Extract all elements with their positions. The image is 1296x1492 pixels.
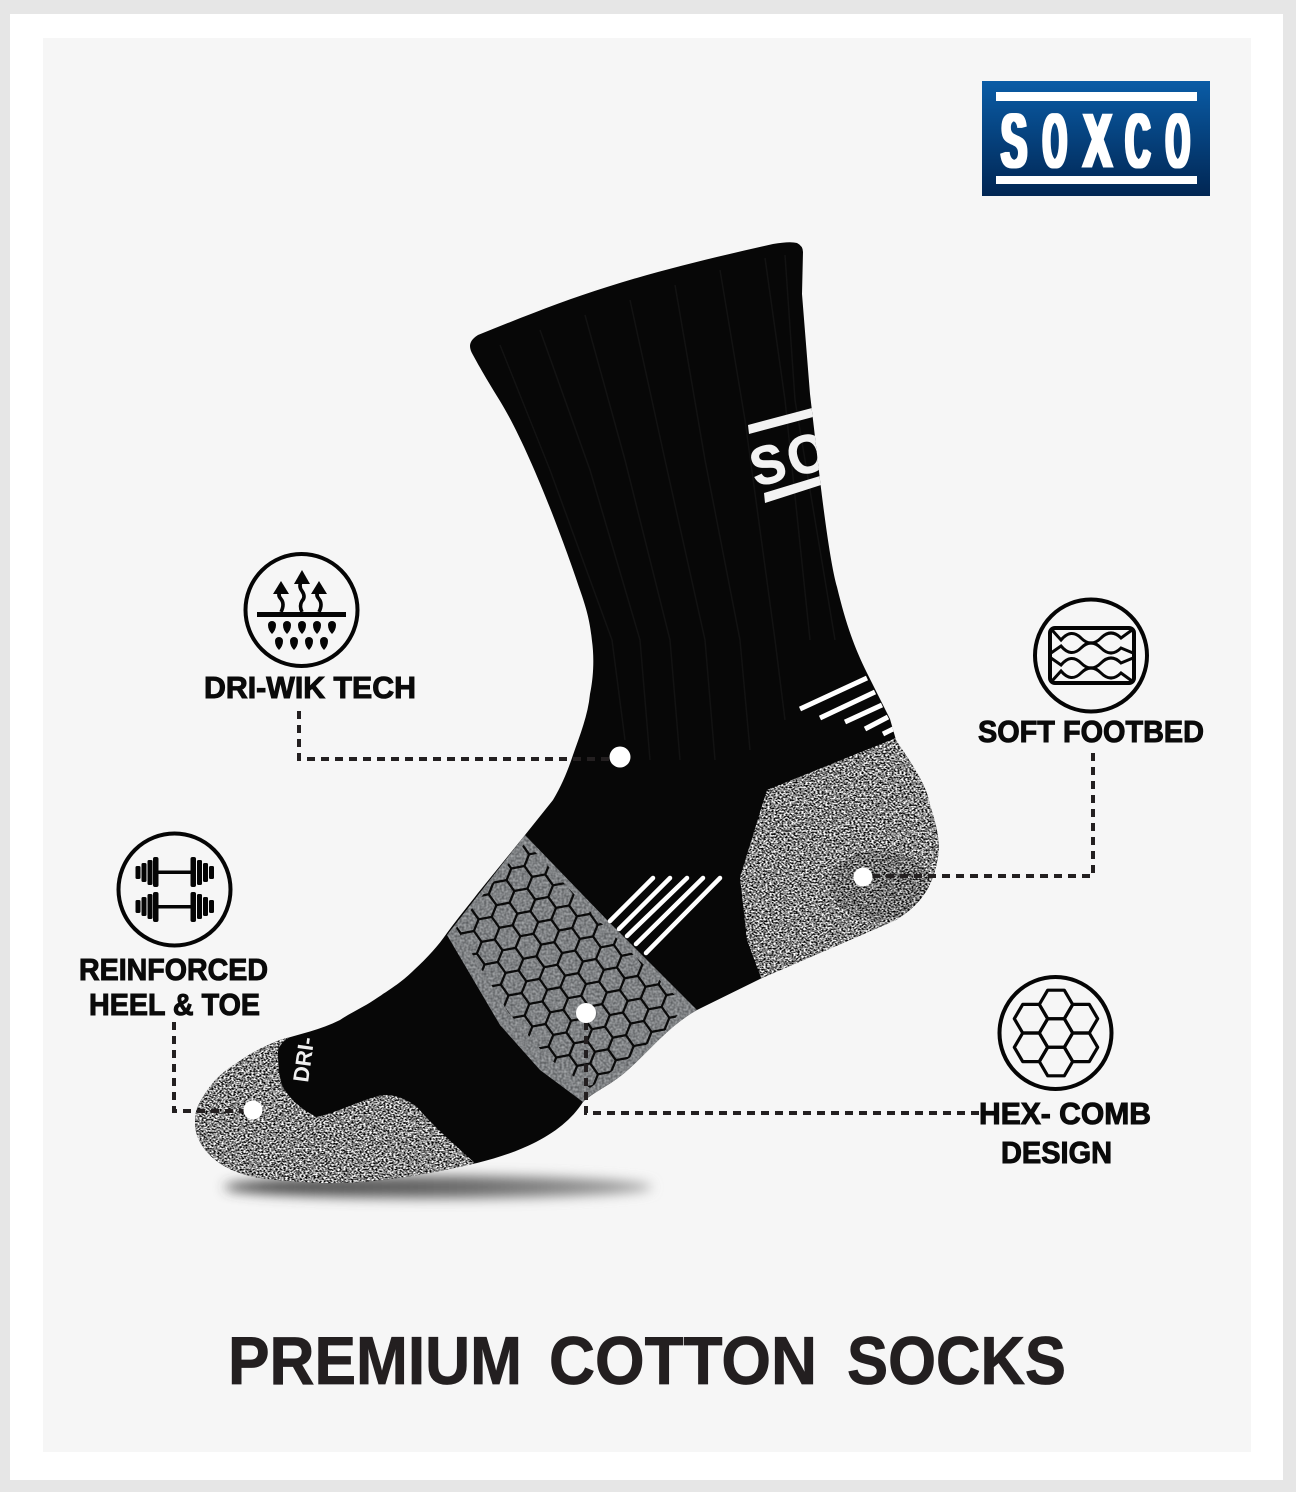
marker dot [576, 1003, 596, 1023]
title [228, 1323, 1066, 1399]
callout: Hex-Comb Design [576, 977, 1151, 1170]
toe patch [195, 1038, 476, 1184]
toe label knit: DRI- [288, 1035, 319, 1084]
heel patch [740, 738, 939, 978]
logo: SOXCO: X [1083, 98, 1112, 185]
title: SOCKS [847, 1323, 1066, 1399]
logo: SOXCO [982, 81, 1210, 196]
icon: honeycomb [1000, 977, 1112, 1089]
icon: cushion [1035, 600, 1147, 712]
label: REINFORCED [79, 952, 268, 987]
title: PREMIUM [228, 1323, 522, 1399]
callout: Soft Footbed [854, 600, 1204, 886]
sock shadow [224, 1176, 652, 1198]
logo: SOXCO: O [1043, 96, 1067, 185]
connector [586, 1022, 980, 1113]
sock illustration [180, 230, 960, 1200]
logo: SOXCO: S [1001, 98, 1027, 185]
connector [872, 753, 1093, 876]
callout: Reinforced Heel & Toe [79, 834, 268, 1120]
ankle stripes [800, 678, 895, 734]
logo: SOXCO: O [1166, 96, 1190, 185]
logo: SOXCO: C [1126, 96, 1150, 184]
connector [299, 711, 612, 759]
hex-comb band [447, 835, 697, 1102]
marker dot [854, 868, 872, 886]
icon: dumbbells [118, 834, 230, 946]
connector [174, 1022, 245, 1111]
marker dot [244, 1100, 262, 1120]
marker dot [610, 746, 630, 768]
label line 2: HEEL & TOE [89, 987, 260, 1022]
leg ribbing [500, 255, 835, 760]
label: HEX- COMB [979, 1096, 1151, 1131]
label line 2: DESIGN [1001, 1135, 1112, 1170]
sock logo knit [748, 408, 820, 503]
title: COTTON [549, 1323, 817, 1399]
callout: Dri-Wik Tech [204, 554, 630, 768]
label: DRI-WIK TECH [204, 670, 416, 705]
label: SOFT FOOTBED [978, 714, 1204, 749]
foot stripes [610, 878, 720, 953]
sock logo knit: SOXCO [744, 388, 956, 499]
icon: moisture wicking [246, 554, 358, 666]
